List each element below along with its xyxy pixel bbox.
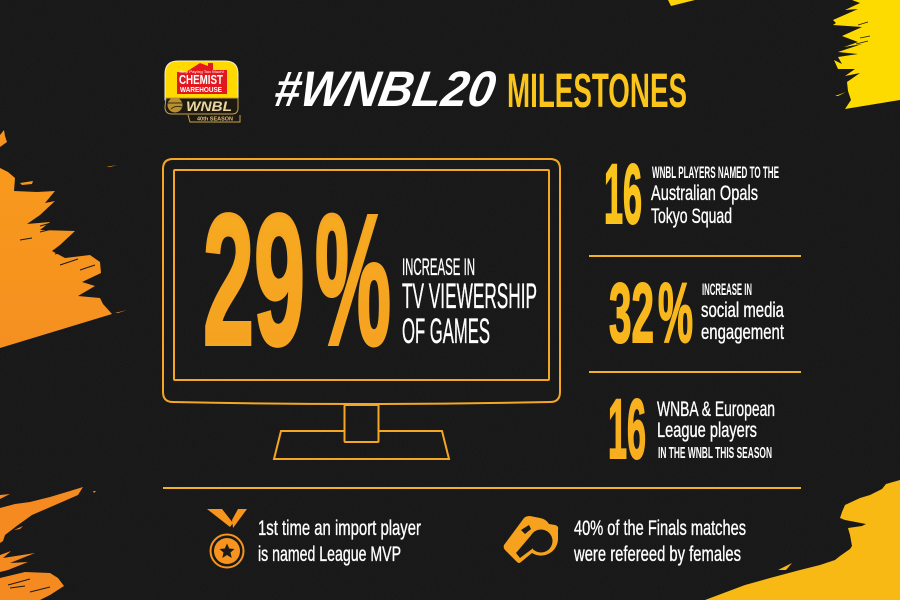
text: WNBA and European league players: IN THE WNBL THIS SEASON xyxy=(658,445,772,462)
icon: whistle xyxy=(504,516,558,563)
text: social media engagement xyxy=(701,281,784,344)
text: WNBA and European league players: WNBA & European xyxy=(657,398,775,421)
text: import player MVP xyxy=(258,517,421,566)
text: finals refereed by females xyxy=(573,517,746,566)
text: import player MVP: 1st time an import player xyxy=(258,517,421,540)
number: 32%: 32 xyxy=(609,266,654,360)
text: WNBA and European league players: League players xyxy=(657,419,757,442)
text: social media engagement: INCREASE IN xyxy=(702,281,752,299)
brush stroke: lower left orange xyxy=(0,487,96,600)
logo: Chemist Warehouse WNBL: Stop Paying Too Much! xyxy=(179,69,224,74)
stat: 16 WNBA and European players: 16 xyxy=(608,382,646,476)
icon: medal xyxy=(207,509,247,568)
stat: 29% TV viewership: % xyxy=(315,177,391,384)
text: finals refereed by females: were refereed by females xyxy=(573,543,741,566)
brush stroke: top right yellow xyxy=(833,0,900,109)
callout: league MVP xyxy=(207,509,421,568)
number: 29%: 29 xyxy=(203,177,305,384)
icon: television outline xyxy=(163,159,560,459)
text: increase in TV viewership of games: OF GAMES xyxy=(402,312,490,351)
text: finals refereed by females: 40% of the Finals matches xyxy=(574,517,746,540)
logo: Chemist Warehouse WNBL: WAREHOUSE xyxy=(180,87,222,94)
stat: 32% social media: % xyxy=(658,266,693,360)
brush stroke: left orange xyxy=(0,130,127,348)
callout: female referees xyxy=(504,516,746,566)
text: TV VIEWERSHIP xyxy=(402,277,537,316)
text: Opals Tokyo squad: Tokyo Squad xyxy=(651,205,732,228)
logo: Chemist Warehouse WNBL xyxy=(165,61,240,122)
stat: 29% TV viewership xyxy=(203,177,537,384)
brush stroke: top yellow fleck xyxy=(668,0,695,6)
stat: 16 Opals players xyxy=(604,147,779,241)
text: social media engagement: social media xyxy=(701,299,784,322)
title: hashtag brush lettering: #WNBL20 xyxy=(270,60,500,117)
text: increase in TV viewership of games xyxy=(402,254,537,351)
text: increase in TV viewership of games: INCREASE IN xyxy=(402,254,475,281)
text: import player MVP: is named League MVP xyxy=(258,543,401,566)
stat: 16 WNBA and European players xyxy=(608,382,775,476)
stat: 16 Opals players: 16 xyxy=(604,147,642,241)
text: Opals Tokyo squad xyxy=(651,164,779,228)
text: social media engagement: engagement xyxy=(701,321,784,344)
text: Opals Tokyo squad: Australian Opals xyxy=(651,182,758,205)
text: WNBA and European league players xyxy=(657,398,775,462)
title xyxy=(270,60,687,118)
logo: Chemist Warehouse WNBL: 40th SEASON xyxy=(197,116,233,122)
title: milestones: MILESTONES xyxy=(507,64,687,118)
logo: Chemist Warehouse WNBL: CHEMIST xyxy=(179,72,223,87)
brush stroke: bottom right amber xyxy=(705,480,900,600)
stat: 32% social media xyxy=(609,266,784,360)
logo: Chemist Warehouse WNBL: WNBL xyxy=(186,98,232,114)
